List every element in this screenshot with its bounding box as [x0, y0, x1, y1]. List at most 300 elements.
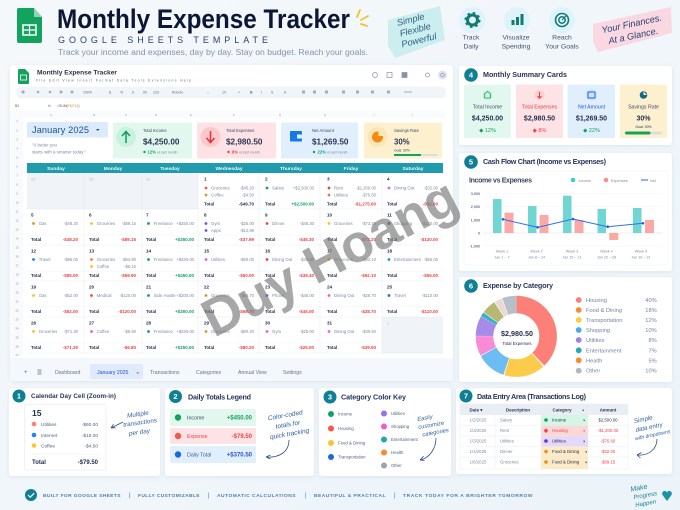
- panel 4: monthly summary cards: [459, 66, 672, 145]
- row numbers: 27: [15, 353, 19, 357]
- make progress happen note: [630, 482, 672, 509]
- card: savings rate: Goal: 30%: [394, 148, 410, 152]
- legend: Income: [578, 179, 591, 183]
- day 2: +$2,500.00: [293, 186, 315, 190]
- card: net amount: [281, 122, 358, 158]
- row numbers: 22: [15, 308, 19, 312]
- day 6: Groceries: [97, 221, 115, 226]
- sheet tabs: Dashboard: [55, 370, 80, 376]
- transactions table: ▾: [585, 460, 587, 464]
- card: net amount: 22% vs last month: [318, 150, 348, 154]
- axis labels and grid: 0: [478, 232, 480, 236]
- zoomed day cell: Coffee: [41, 444, 55, 450]
- heading: Data Entry Area (Transactions Log): [477, 392, 587, 401]
- row numbers: 16: [15, 254, 19, 258]
- transactions table: Utilities: [552, 438, 566, 444]
- day 20: -$120.00: [118, 309, 136, 314]
- month selector: [27, 122, 108, 138]
- footer: [25, 489, 533, 501]
- legend: [571, 178, 657, 183]
- toolbar: .0: [131, 90, 134, 94]
- sheet tabs: January 2025: [97, 370, 129, 376]
- daily total row: Daily Total: [187, 453, 211, 459]
- badge: your finances: Your Finances.: [601, 13, 663, 35]
- day 25: Total: [387, 309, 397, 314]
- day 13: Total: [89, 273, 99, 278]
- net line: [502, 218, 644, 229]
- card: savings rate: [620, 84, 667, 138]
- toolbar: .00: [142, 90, 147, 94]
- day 26: Total: [31, 345, 41, 350]
- day 17: Groceries: [334, 257, 353, 262]
- card: total expenses: Total Expenses: [522, 104, 557, 110]
- card: total expenses: $2,980.50: [524, 116, 555, 122]
- arrow: [637, 439, 657, 458]
- icon group: visualize spending: [502, 7, 531, 50]
- card: total income: Total Income: [143, 128, 167, 133]
- transactions table: Housing: [552, 428, 568, 433]
- day 15: Total: [204, 273, 214, 278]
- day 18: Total: [387, 273, 397, 278]
- day 16: -$38.40: [299, 273, 314, 278]
- day 5: Total: [31, 237, 41, 242]
- day 3: Total: [327, 202, 337, 206]
- day 27: 27: [89, 320, 95, 326]
- footer: TRACK TODAY FOR A BRIGHTER TOMORROW: [403, 493, 533, 499]
- category list right: Utilities: [391, 411, 405, 416]
- day 11: Total: [387, 237, 397, 242]
- card: net amount: ◆ 22%: [583, 128, 600, 134]
- day 24: Dining Out: [334, 293, 355, 298]
- transactions table: Food & Dining: [552, 449, 580, 454]
- transactions table: Amount: [600, 408, 617, 412]
- legend: Expenses: [611, 179, 628, 183]
- card: total income: Total Income: [473, 104, 502, 110]
- day 16: [265, 248, 315, 278]
- transactions table: Groceries: [500, 460, 519, 464]
- legend: 10%: [645, 369, 657, 375]
- legend: Utilities: [586, 338, 604, 344]
- day 21: 21: [146, 284, 152, 290]
- legend: 7%: [648, 348, 657, 354]
- column headers: H: [324, 113, 326, 117]
- day 1: -$45.20: [240, 186, 255, 190]
- day 12: -$95.00: [63, 273, 78, 278]
- day 25: [387, 284, 439, 314]
- row numbers: 1: [16, 119, 18, 123]
- day 27: -$6.80: [124, 329, 137, 334]
- daily total row: +$370.50: [227, 453, 253, 459]
- annotation: [631, 411, 671, 442]
- day 18: -$55.00: [423, 273, 438, 278]
- number badge 3: 3: [328, 393, 332, 402]
- day 11: [387, 212, 439, 242]
- legend: 40%: [645, 298, 657, 304]
- day 27: [89, 320, 137, 350]
- footer: |: [305, 493, 307, 499]
- day 2: Total: [265, 202, 275, 206]
- annotation: Easily: [417, 414, 434, 423]
- day 29: 29: [204, 320, 210, 326]
- sheet tabs: Settings: [283, 370, 302, 376]
- sheet tabs: +: [24, 370, 28, 376]
- day 29: -$80.20: [240, 329, 255, 334]
- day 15: [204, 248, 255, 278]
- day 10: [327, 212, 377, 242]
- row numbers: 10: [15, 200, 19, 204]
- card: net amount: Net Amount: [578, 104, 606, 110]
- day 29 (previous month): 29: [31, 176, 36, 182]
- card: total income: $4,250.00: [143, 138, 180, 146]
- category list left: Income: [338, 412, 353, 416]
- icon group: visualize spending: Spending: [502, 44, 531, 50]
- row numbers: 9: [16, 192, 18, 196]
- category list right: Other: [391, 463, 402, 468]
- card: savings rate: [364, 122, 442, 158]
- day 23: Total: [265, 309, 275, 314]
- heading: Cash Flow Chart (Income vs Expenses): [483, 157, 607, 166]
- day 2: [265, 176, 315, 206]
- transactions table: Utilities: [500, 438, 514, 444]
- row numbers: 14: [15, 236, 19, 240]
- sheet tabs: Transactions: [150, 370, 180, 376]
- day 3: 3: [327, 176, 330, 182]
- day 1: [204, 176, 255, 206]
- day 2: +$2,500.00: [291, 202, 314, 206]
- legend: [576, 297, 657, 375]
- day 8: Apps: [211, 228, 221, 233]
- transactions table: 1/3/2025: [470, 428, 487, 433]
- category list right: Shopping: [391, 424, 410, 429]
- day 27: Coffee: [97, 329, 110, 334]
- day 17: -$92.10: [361, 273, 376, 278]
- legend: Entertainment: [586, 348, 622, 354]
- day 22: Total: [204, 309, 214, 314]
- annotation: [417, 412, 449, 439]
- day 4: Total: [387, 202, 397, 206]
- toolbar: %: [120, 90, 123, 94]
- day 31: -$39.50: [361, 345, 376, 350]
- heading: Monthly Summary Cards: [483, 70, 567, 79]
- icon group: track daily: Daily: [463, 44, 479, 50]
- week labels: Week 5: [635, 250, 647, 254]
- toolbar: S: [271, 90, 274, 94]
- day 28: +$250.00: [175, 345, 194, 350]
- day 7: +$350.00: [176, 221, 195, 226]
- day 29: Groceries: [211, 329, 230, 334]
- legend: 10%: [645, 328, 657, 334]
- arrow: [420, 438, 436, 460]
- number badge 6: [464, 279, 478, 293]
- transactions table: Date ▾: [470, 408, 483, 412]
- badge: simple flexible powerful: [388, 6, 445, 58]
- day 4: 4: [387, 176, 390, 182]
- window icons: [372, 70, 447, 80]
- category list right: Entertainment: [391, 437, 419, 442]
- card: net amount: Net Amount: [312, 128, 335, 133]
- day 12: Total: [31, 273, 41, 278]
- day 11: 11: [387, 212, 392, 218]
- day 19: -$52.00: [63, 309, 78, 314]
- card: total income: $4,250.00: [472, 116, 503, 122]
- legend: 12%: [645, 318, 657, 324]
- day 4: -$32.00: [424, 186, 439, 190]
- transactions table: Income: [552, 418, 567, 422]
- day 26: 26: [31, 320, 37, 326]
- number badge 1: 1: [17, 392, 21, 401]
- card: total expenses: $2,980.50: [226, 138, 263, 146]
- day 31 (previous month): 31: [146, 176, 151, 182]
- card: total expenses: Total Expenses: [226, 128, 254, 133]
- menu bar: File Edit View Insert Format Data Tools Extensions Help: [36, 78, 191, 82]
- day 31: Dining Out: [334, 329, 355, 334]
- calendar header: Saturday: [403, 166, 424, 172]
- day 16: Dining Out: [272, 257, 293, 262]
- annotation: Simple: [633, 414, 654, 425]
- day 3: [327, 176, 377, 206]
- card: total expenses: 8% vs last month: [232, 150, 260, 154]
- column headers: A: [50, 113, 52, 117]
- card: total expenses: [516, 84, 563, 138]
- day 8: 8: [204, 212, 207, 218]
- icon group: visualize spending: Visualize: [502, 34, 530, 42]
- card: total expenses: [197, 122, 276, 158]
- day 24: [327, 284, 377, 314]
- toolbar: I: [261, 90, 262, 94]
- day 1: -$4.50: [242, 192, 255, 198]
- toolbar: B: [250, 90, 253, 94]
- day 22: [204, 284, 255, 314]
- footer: |: [129, 493, 131, 499]
- transactions table: 1/4/2025: [470, 449, 487, 454]
- day 8: Gym: [211, 221, 220, 226]
- week labels: Week 1: [496, 250, 508, 254]
- row numbers: 18: [15, 272, 19, 276]
- row numbers: 15: [15, 246, 19, 250]
- day 9: -$46.30: [299, 237, 314, 242]
- annotation: with dropdowns: [635, 429, 671, 442]
- formula bar: B2: [15, 104, 19, 108]
- transactions table: Description: [506, 408, 530, 412]
- column headers: C: [125, 113, 127, 117]
- row numbers: [11, 110, 23, 357]
- day 5: Gas: [39, 221, 47, 226]
- day 28: Freelance: [154, 329, 173, 334]
- day 3: -$1,275.60: [354, 202, 376, 206]
- day 20: [89, 284, 137, 314]
- card: savings rate: 30%: [636, 116, 651, 122]
- expense row: -$79.50: [232, 434, 253, 440]
- card: savings rate: Savings Rate: [628, 104, 659, 110]
- watermark: Duy Hoang: [192, 167, 468, 349]
- day 1: Coffee: [211, 192, 224, 198]
- day 5: [31, 212, 79, 242]
- footer: FULLY CUSTOMIZABLE: [138, 493, 200, 499]
- day 21: +$300.00: [176, 293, 195, 298]
- day 28: 28: [146, 320, 152, 326]
- day 31: 31: [327, 320, 333, 326]
- day 21: Total: [146, 309, 156, 314]
- day 8: -$37.99: [239, 237, 254, 242]
- week labels: Jan 22 – 28: [597, 256, 616, 260]
- transactions table: 1/2/2025: [470, 418, 487, 422]
- legend: Other: [586, 369, 600, 375]
- day 26: -$71.30: [63, 345, 78, 350]
- day 2: Salary: [272, 186, 285, 190]
- day 20: Medical: [97, 293, 112, 298]
- legend: Health: [586, 358, 602, 364]
- sheet tabs: Annual View: [238, 370, 267, 376]
- badge: your finances: At a Glance.: [607, 26, 659, 46]
- transactions table: $2,500.00: [598, 418, 618, 422]
- transactions table: 1/6/2025: [470, 460, 487, 464]
- day 14: 14: [146, 248, 152, 254]
- day 26: -$71.30: [64, 329, 79, 334]
- column headers: D: [155, 113, 157, 117]
- day 15: 15: [204, 248, 210, 254]
- zoomed day cell: [24, 404, 106, 470]
- day 13: Coffee: [97, 264, 110, 269]
- make progress happen note: Progress: [633, 491, 658, 501]
- badge: simple flexible powerful: Simple: [396, 11, 425, 28]
- day 30: Total: [265, 345, 275, 350]
- day 21: [146, 284, 195, 314]
- day 9: -$46.30: [300, 221, 315, 226]
- number badge 5: 5: [469, 158, 473, 167]
- formula bar: fx: [48, 104, 52, 108]
- badge: simple flexible powerful: Flexible: [399, 21, 432, 39]
- day 17: 17: [327, 248, 333, 254]
- week labels: Week 3: [566, 250, 578, 254]
- week labels: Jan 15 – 21: [562, 256, 582, 260]
- zoomed day cell: 15: [32, 408, 42, 418]
- footer: |: [394, 493, 396, 499]
- transactions table: Rent: [500, 428, 510, 433]
- icon group: reach your goals: Reach: [552, 34, 572, 42]
- day 6: Total: [89, 237, 99, 242]
- day 8: -$25.00: [240, 221, 255, 226]
- badge: your finances: [593, 7, 672, 52]
- day 2: 2: [265, 176, 268, 182]
- make progress happen note: Make: [630, 484, 648, 494]
- day 4: Dining Out: [394, 186, 415, 190]
- day 19: Total: [31, 309, 41, 314]
- day 30: -$25.00: [299, 345, 314, 350]
- zoomed day cell: -$4.50: [84, 444, 98, 450]
- day 29: [204, 320, 255, 350]
- row numbers: 13: [15, 228, 19, 232]
- badge: simple flexible powerful: Powerful: [400, 31, 438, 49]
- toolbar: 100%: [83, 90, 92, 94]
- day 30: [265, 320, 315, 350]
- day 10: Total: [327, 237, 337, 242]
- week labels: Week 4: [600, 250, 613, 254]
- week labels: [494, 250, 651, 260]
- day 7: [146, 212, 195, 242]
- card: savings rate: Savings Rate: [394, 128, 420, 133]
- day 24: Total: [327, 309, 337, 314]
- day 14: Total: [146, 273, 156, 278]
- card: net amount: [568, 84, 615, 138]
- day 7: Freelance: [154, 221, 173, 226]
- day 11: -$120.00: [420, 237, 438, 242]
- day 24: -$28.70: [361, 309, 376, 314]
- income row: Income: [187, 416, 204, 422]
- day 30 (previous month): 30: [89, 176, 94, 182]
- annotation: data entry: [635, 421, 664, 434]
- transactions table: -$75.60: [601, 438, 616, 444]
- annotation: transactions: [123, 417, 158, 429]
- legend: Housing: [586, 298, 607, 304]
- day 4: [387, 176, 439, 206]
- number badge 2: 2: [173, 392, 178, 401]
- day 15: Utilities: [211, 257, 225, 262]
- week labels: Jan 1 – 7: [494, 256, 510, 260]
- transactions table: Dinner: [500, 449, 513, 454]
- zoomed day cell: -$79.50: [78, 460, 99, 466]
- annotation: totals for: [275, 419, 302, 431]
- day 26: [31, 320, 79, 350]
- day 7: 7: [146, 212, 149, 218]
- formula bar: [15, 104, 80, 108]
- week labels: Week 2: [530, 250, 543, 254]
- transactions table: Category: [552, 408, 572, 412]
- donut chart: Total Expenses: [502, 341, 532, 346]
- heading: Calendar Day Cell (Zoom-in): [31, 393, 116, 400]
- toolbar: 10: [222, 90, 226, 94]
- day 18: [387, 248, 439, 278]
- toolbar: +: [238, 90, 240, 94]
- icon: check badge: [25, 489, 37, 501]
- day 9: Total: [265, 237, 275, 242]
- day 31: [327, 320, 377, 350]
- legend: 18%: [645, 308, 657, 314]
- day 12: 12: [31, 248, 37, 254]
- day 13: -$64.80: [122, 257, 137, 262]
- day 30: 30: [265, 320, 271, 326]
- calendar header: Wednesday: [215, 166, 243, 172]
- make progress happen note: Happen: [635, 499, 657, 509]
- annotation: [266, 409, 310, 441]
- day 22: 22: [204, 284, 210, 290]
- day 14: +$450.00: [175, 273, 194, 278]
- day 11: -$120.00: [421, 221, 439, 226]
- row numbers: 11: [16, 210, 19, 214]
- column headers: F: [233, 113, 235, 117]
- toolbar: Roboto: [172, 90, 183, 94]
- day 3: Utilities: [334, 192, 348, 198]
- card: total income: [464, 84, 511, 138]
- row numbers: 23: [15, 318, 19, 322]
- card: total income: ◆ 12%: [479, 128, 496, 134]
- card: savings rate: Goal: 30%: [635, 125, 652, 129]
- axis labels and grid: 1,000: [471, 218, 480, 222]
- day 12: Travel: [39, 257, 51, 262]
- day 19: 19: [31, 284, 37, 290]
- day 5: 5: [31, 212, 34, 218]
- column headers: G: [279, 113, 281, 117]
- day 16: Total: [265, 273, 275, 278]
- day 17: [327, 248, 377, 278]
- row numbers: 7: [16, 174, 18, 178]
- icon group: reach your goals: Your Goals: [545, 44, 579, 50]
- day 5: -$48.20: [63, 237, 78, 242]
- annotation: quick tracking: [269, 427, 310, 441]
- icon group: track daily: [460, 7, 486, 50]
- row numbers: 26: [15, 344, 19, 348]
- day 23: 23: [265, 284, 271, 290]
- row numbers: 24: [15, 326, 19, 330]
